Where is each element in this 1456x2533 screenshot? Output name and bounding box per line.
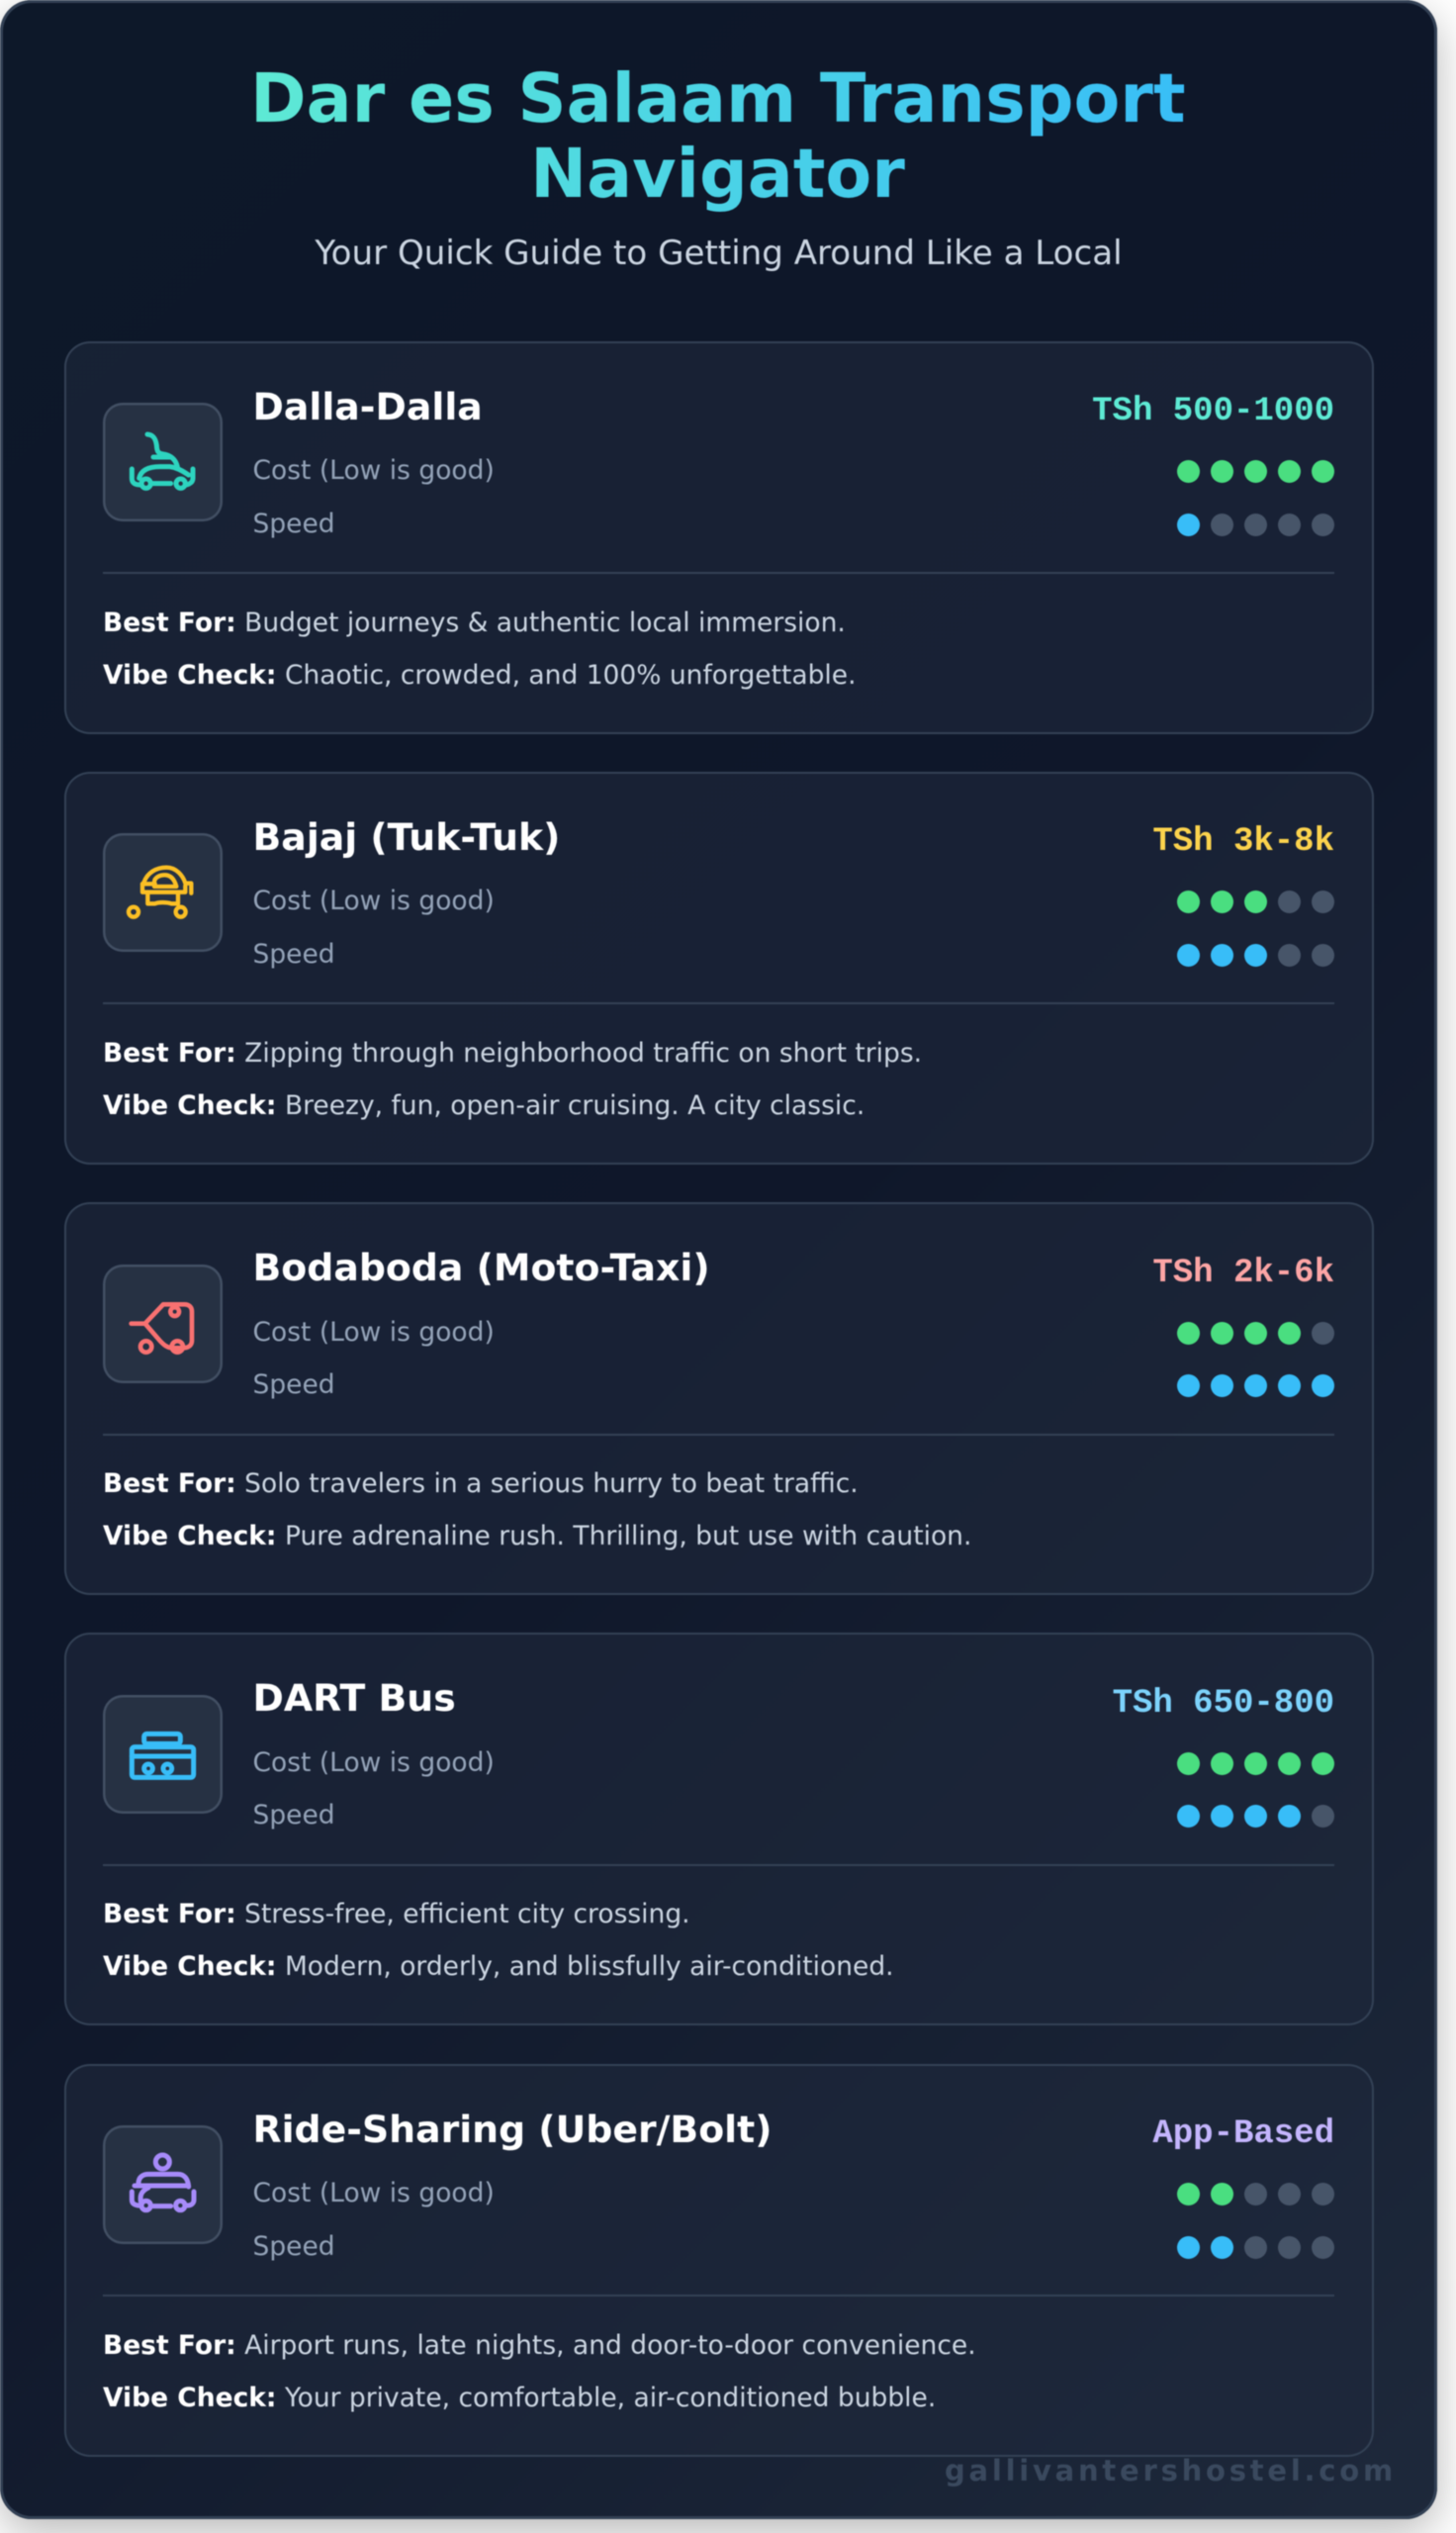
panel: DART Bus xyxy=(64,1633,1373,2025)
vibe check text: Vibe Check: Your private, comfortable, air-conditioned bubble. xyxy=(103,2383,936,2413)
vibe check text: Vibe Check: Breezy, fun, open-air cruising. A city classic. xyxy=(103,1090,864,1121)
cost rating dots xyxy=(1176,459,1335,484)
vibe check text: Vibe Check: Modern, orderly, and blissfully air-conditioned. xyxy=(103,1951,894,1982)
cost rating dots xyxy=(1176,1751,1335,1776)
subtitle: Your Quick Guide to Getting Around Like a Local xyxy=(315,234,1123,273)
cost rating dots xyxy=(1176,890,1335,914)
best for text: Best For: Airport runs, late nights, and door-to-door convenience. xyxy=(103,2330,976,2361)
cost label: Cost (Low is good) xyxy=(253,2178,495,2208)
vibe check text: Vibe Check: Chaotic, crowded, and 100% unforgettable. xyxy=(103,659,857,691)
speed rating dots xyxy=(1176,513,1335,537)
speed rating dots xyxy=(1176,943,1335,968)
price: TSh 2k-6k xyxy=(1152,1255,1334,1292)
heading: Bajaj (Tuk-Tuk) xyxy=(253,815,560,859)
cost label: Cost (Low is good) xyxy=(253,886,495,916)
price: TSh 500-1000 xyxy=(1092,393,1334,430)
icon: bodaboda xyxy=(103,1265,223,1383)
icon: dalla-dalla xyxy=(103,403,223,521)
title: Dar es Salaam Transport xyxy=(250,60,1186,139)
speed rating dots xyxy=(1176,1373,1335,1398)
best for text: Best For: Budget journeys & authentic local immersion. xyxy=(103,608,846,637)
price: TSh 650-800 xyxy=(1113,1685,1334,1723)
title: Navigator xyxy=(530,136,905,214)
speed label: Speed xyxy=(253,1369,335,1400)
best for text: Best For: Zipping through neighborhood traffic on short trips. xyxy=(103,1038,922,1069)
speed label: Speed xyxy=(253,509,335,538)
speed rating dots xyxy=(1176,2235,1335,2260)
icon: ride-sharing xyxy=(103,2125,223,2244)
panel: Bodaboda xyxy=(64,1202,1373,1595)
icon: DART bus xyxy=(103,1695,223,1814)
price: TSh 3k-8k xyxy=(1152,823,1334,861)
best for text: Best For: Solo travelers in a serious hurry to beat traffic. xyxy=(103,1468,859,1499)
heading: Ride-Sharing (Uber/Bolt) xyxy=(253,2108,772,2151)
vibe check text: Vibe Check: Pure adrenaline rush. Thrilling, but use with caution. xyxy=(103,1521,971,1551)
cost label: Cost (Low is good) xyxy=(253,1747,495,1778)
speed label: Speed xyxy=(253,939,335,970)
cost label: Cost (Low is good) xyxy=(253,1317,495,1348)
speed rating dots xyxy=(1176,1804,1335,1829)
title xyxy=(250,62,1185,213)
cost label: Cost (Low is good) xyxy=(253,455,495,486)
panel: Ride-Sharing xyxy=(64,2064,1373,2457)
panel: Bajaj xyxy=(64,772,1373,1165)
icon: bajaj xyxy=(103,833,223,952)
watermark: gallivantershostel.com xyxy=(945,2454,1397,2487)
cost rating dots xyxy=(1176,1321,1335,1346)
cost rating dots xyxy=(1176,2182,1335,2206)
speed label: Speed xyxy=(253,1800,335,1830)
heading: DART Bus xyxy=(253,1676,456,1720)
price: App-Based xyxy=(1152,2115,1334,2153)
panel: Dalla-Dalla xyxy=(64,340,1373,734)
best for text: Best For: Stress-free, efficient city crossing. xyxy=(103,1899,690,1929)
speed label: Speed xyxy=(253,2231,335,2262)
heading: Bodaboda (Moto-Taxi) xyxy=(253,1246,710,1289)
heading: Dalla-Dalla xyxy=(253,384,483,427)
